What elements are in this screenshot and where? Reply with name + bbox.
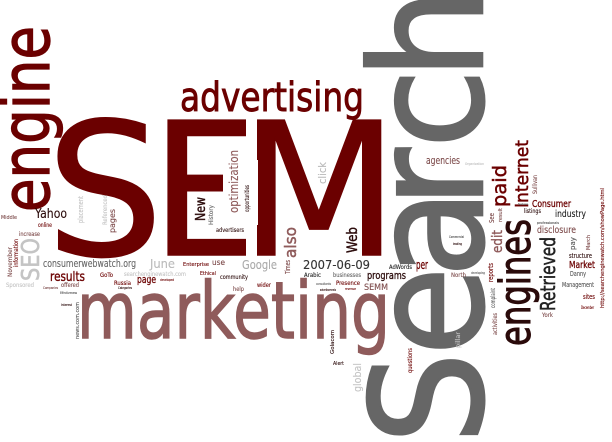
- group: small vertical words: global: [351, 363, 364, 392]
- group: small words: revenue: [345, 287, 356, 291]
- word: also: also: [281, 227, 300, 258]
- group: small words: leading: [453, 242, 462, 246]
- group: small vertical words: Golacom: [330, 330, 336, 354]
- group: small words: Middle: [1, 215, 18, 221]
- group: small vertical words: placement: [77, 196, 85, 223]
- group: small vertical words: pages: [108, 209, 117, 233]
- group: small vertical words: http://searchenginewatch.com/showPage.html: [600, 188, 606, 308]
- group: small words: interest: [61, 303, 73, 307]
- group: small words: searchenginewatch.com: [124, 270, 186, 278]
- group: small words: Management: [562, 281, 594, 289]
- group: small words: help: [233, 286, 244, 293]
- word: Yahoo: Yahoo: [34, 207, 67, 222]
- group: small words: sites: [583, 293, 595, 301]
- word: agencies: agencies: [426, 155, 460, 167]
- group: small vertical words: opportunities: [243, 185, 251, 212]
- group: small words: York: [541, 311, 553, 319]
- group: small words: features: [518, 202, 528, 206]
- word: page: page: [137, 273, 156, 286]
- word: paid: paid: [489, 165, 511, 207]
- word: results: results: [50, 270, 85, 285]
- group: small words: consultants: [316, 282, 331, 286]
- group: small words: businesses: [333, 272, 361, 279]
- group: small vertical words: pay: [569, 237, 577, 250]
- group: small words: Arabic: [304, 272, 321, 279]
- word: SEMM: SEMM: [364, 283, 388, 293]
- group: small words: December: [581, 305, 594, 310]
- group: small words: Sponsored: [6, 282, 34, 289]
- word: industry: industry: [555, 209, 586, 220]
- group: small vertical words: news.com.com: [75, 302, 81, 339]
- group: small words: North: [451, 271, 466, 279]
- word: Market: Market: [569, 260, 595, 271]
- group: small words: Organization: [465, 162, 484, 166]
- word: SEM: SEM: [46, 83, 399, 299]
- group: small words: online: [38, 222, 52, 229]
- group: small words: Presence: [336, 280, 360, 287]
- group: small words: increase: [19, 231, 40, 238]
- group: small words: Danny: [570, 270, 586, 278]
- group: small vertical words: [7, 175, 606, 392]
- group: small vertical words: questions: [406, 348, 414, 373]
- word: programs: programs: [367, 269, 406, 282]
- word: Retrieved: Retrieved: [536, 237, 560, 311]
- group: small words: advertisers: [216, 226, 244, 234]
- group: small vertical words: Referenced: [102, 195, 109, 225]
- group: small vertical words: Times: [284, 260, 292, 275]
- group: small words: wider: [257, 282, 271, 289]
- group: small vertical words: pillar: [455, 331, 462, 348]
- word: click: click: [316, 161, 329, 184]
- word: engines: engines: [491, 219, 541, 346]
- group: small words: developing: [471, 271, 485, 275]
- group: small vertical words: complaint: [490, 288, 497, 308]
- group: small words: Russia: [114, 280, 131, 287]
- group: small vertical words: result: [498, 207, 504, 222]
- group: small words: developed: [160, 278, 174, 282]
- word: Google: Google: [242, 258, 277, 272]
- word: disclosure: disclosure: [537, 225, 576, 236]
- group: small vertical words: Sullivan: [532, 175, 539, 194]
- group: small vertical words: March: [586, 235, 592, 250]
- group: small words: GoTo: [100, 272, 113, 279]
- group: small words: Commercial: [449, 235, 464, 239]
- group: small vertical words: information: [13, 239, 20, 267]
- group: small words: Enterprise: [183, 262, 210, 268]
- word: Internet: Internet: [512, 140, 533, 208]
- group: small words: AdWords: [389, 263, 412, 271]
- group: small vertical words: activities: [492, 313, 499, 335]
- group: small words: advertisements: [320, 288, 336, 292]
- group: small vertical words: History: [208, 205, 215, 225]
- group: small words: Companies: [43, 286, 58, 290]
- word: per: per: [416, 258, 428, 272]
- word: optimization: optimization: [227, 150, 241, 213]
- word: advertising: advertising: [180, 75, 364, 121]
- group: small words: offered: [61, 282, 79, 289]
- group: small words: community: [220, 274, 248, 281]
- word: consumerwebwatch.org: consumerwebwatch.org: [43, 258, 136, 270]
- group: small words: [1, 162, 595, 367]
- group: small words: Ethical: [200, 271, 216, 277]
- word: June: June: [149, 257, 175, 271]
- group: small vertical words: November: [7, 246, 14, 277]
- word: Web: Web: [345, 227, 361, 253]
- group: small vertical words: See: [488, 213, 496, 223]
- word: Consumer: Consumer: [532, 199, 571, 210]
- word: marketing: marketing: [77, 267, 390, 357]
- group: small vertical words: reports: [487, 263, 495, 282]
- group: small words: structure: [569, 252, 592, 260]
- word: edit: edit: [490, 230, 506, 253]
- group: small words: listings: [524, 207, 541, 215]
- group: small words: Categories: [118, 286, 132, 290]
- word: 2007-06-09: 2007-06-09: [303, 258, 370, 272]
- group: small words: Alert: [333, 361, 345, 367]
- group: small words: Effectiveness: [60, 291, 77, 295]
- word: New: New: [194, 197, 209, 221]
- group: small words: use: [212, 258, 225, 267]
- word: SEO: SEO: [16, 238, 45, 281]
- group: small words: professionals: [537, 221, 559, 225]
